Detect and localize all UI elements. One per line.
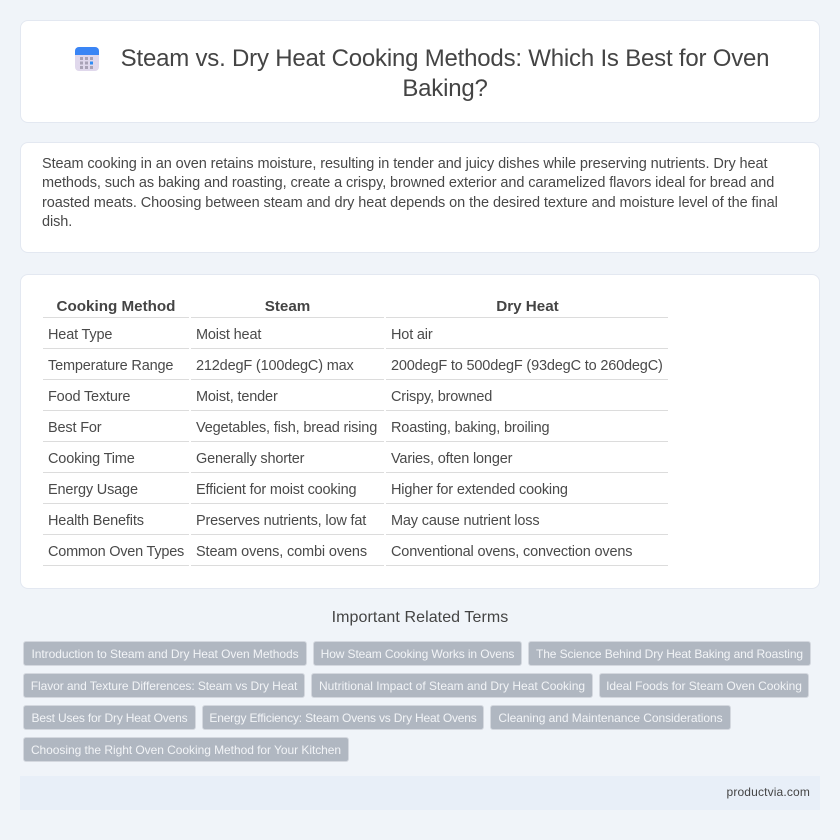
comparison table [43, 298, 668, 566]
row: food texture: Food Texture [48, 389, 130, 405]
row: cooking time: Generally shorter [196, 451, 304, 467]
tag [599, 673, 809, 698]
row: food texture: Crispy, browned [391, 389, 492, 405]
tag: Choosing the Right Oven Cooking Method for Your Kitchen [31, 743, 341, 757]
row: temperature range: Temperature Range [48, 358, 173, 374]
row: energy usage: Efficient for moist cooking [196, 482, 356, 498]
row: temperature range: 212degF (100degC) max [196, 358, 354, 374]
row: health benefits: Health Benefits [48, 513, 144, 529]
icon: calendar [75, 47, 99, 71]
title: Steam vs. Dry Heat Cooking Methods: Which Is Best for Oven Baking? [121, 45, 769, 102]
row: best for [48, 420, 549, 436]
tag: The Science Behind Dry Heat Baking and Roasting [536, 647, 803, 661]
tag: How Steam Cooking Works in Ovens [321, 647, 514, 661]
tag [313, 641, 522, 666]
tag [23, 705, 196, 730]
tag: Ideal Foods for Steam Oven Cooking [606, 679, 802, 693]
row: cooking time [48, 451, 512, 467]
footer source: productvia.com [727, 785, 810, 799]
heading: important related terms: Important Related Terms [332, 609, 508, 626]
tag [202, 705, 484, 730]
row: temperature range: 200degF to 500degF (93degC to 260degC) [391, 358, 663, 374]
tag: Best Uses for Dry Heat Ovens [32, 711, 187, 725]
panel: introduction [20, 142, 820, 253]
tag [23, 737, 349, 762]
row: energy usage [48, 482, 568, 498]
row: cooking time: Varies, often longer [391, 451, 512, 467]
text block: introduction: dish. [42, 214, 72, 230]
tag [528, 641, 811, 666]
row: heat type: Moist heat [196, 327, 261, 343]
table header: Steam [265, 298, 310, 315]
row: common oven types [48, 544, 632, 560]
row: food texture: Moist, tender [196, 389, 278, 405]
table header: Dry Heat [496, 298, 559, 315]
tag [23, 641, 307, 666]
row: energy usage: Higher for extended cooking [391, 482, 568, 498]
row: heat type: Heat Type [48, 327, 112, 343]
tag: Cleaning and Maintenance Considerations [498, 711, 723, 725]
panel: comparison table [20, 274, 820, 589]
row: health benefits [48, 513, 540, 529]
row: common oven types: Steam ovens, combi ovens [196, 544, 367, 560]
table header: Cooking Method [57, 298, 175, 315]
row: common oven types: Conventional ovens, convection ovens [391, 544, 632, 560]
panel: header [20, 20, 820, 123]
text block: introduction [42, 156, 778, 230]
row: health benefits: Preserves nutrients, low fat [196, 513, 366, 529]
tag: Flavor and Texture Differences: Steam vs Dry Heat [31, 679, 297, 693]
tag [311, 673, 593, 698]
row: best for: Best For [48, 420, 101, 436]
row: best for: Roasting, baking, broiling [391, 420, 549, 436]
footer [20, 776, 820, 810]
text block: introduction: roasted meats. Choosing between steam and dry heat depends on the desired texture and moisture level of the final [42, 195, 778, 211]
row: cooking time: Cooking Time [48, 451, 135, 467]
row: health benefits: May cause nutrient loss [391, 513, 539, 529]
tag: Energy Efficiency: Steam Ovens vs Dry Heat Ovens [209, 711, 477, 725]
row: energy usage: Energy Usage [48, 482, 138, 498]
tag: Nutritional Impact of Steam and Dry Heat Cooking [319, 679, 585, 693]
row: common oven types: Common Oven Types [48, 544, 184, 560]
text block: introduction: methods, such as baking and roasting, create a crispy, browned exterior and caramelized flavors ideal for bread and [42, 175, 774, 191]
row: temperature range [48, 358, 663, 374]
tag [490, 705, 731, 730]
row: food texture [48, 389, 492, 405]
related terms tags [23, 641, 811, 762]
table header [57, 298, 559, 315]
tag [23, 673, 305, 698]
row: best for: Vegetables, fish, bread rising [196, 420, 377, 436]
row: heat type: Hot air [391, 327, 433, 343]
row: heat type [48, 327, 433, 343]
text block: introduction: Steam cooking in an oven retains moisture, resulting in tender and juicy dishes while preserving nutrients. Dry heat [42, 156, 767, 172]
tag: Introduction to Steam and Dry Heat Oven Methods [31, 647, 299, 661]
